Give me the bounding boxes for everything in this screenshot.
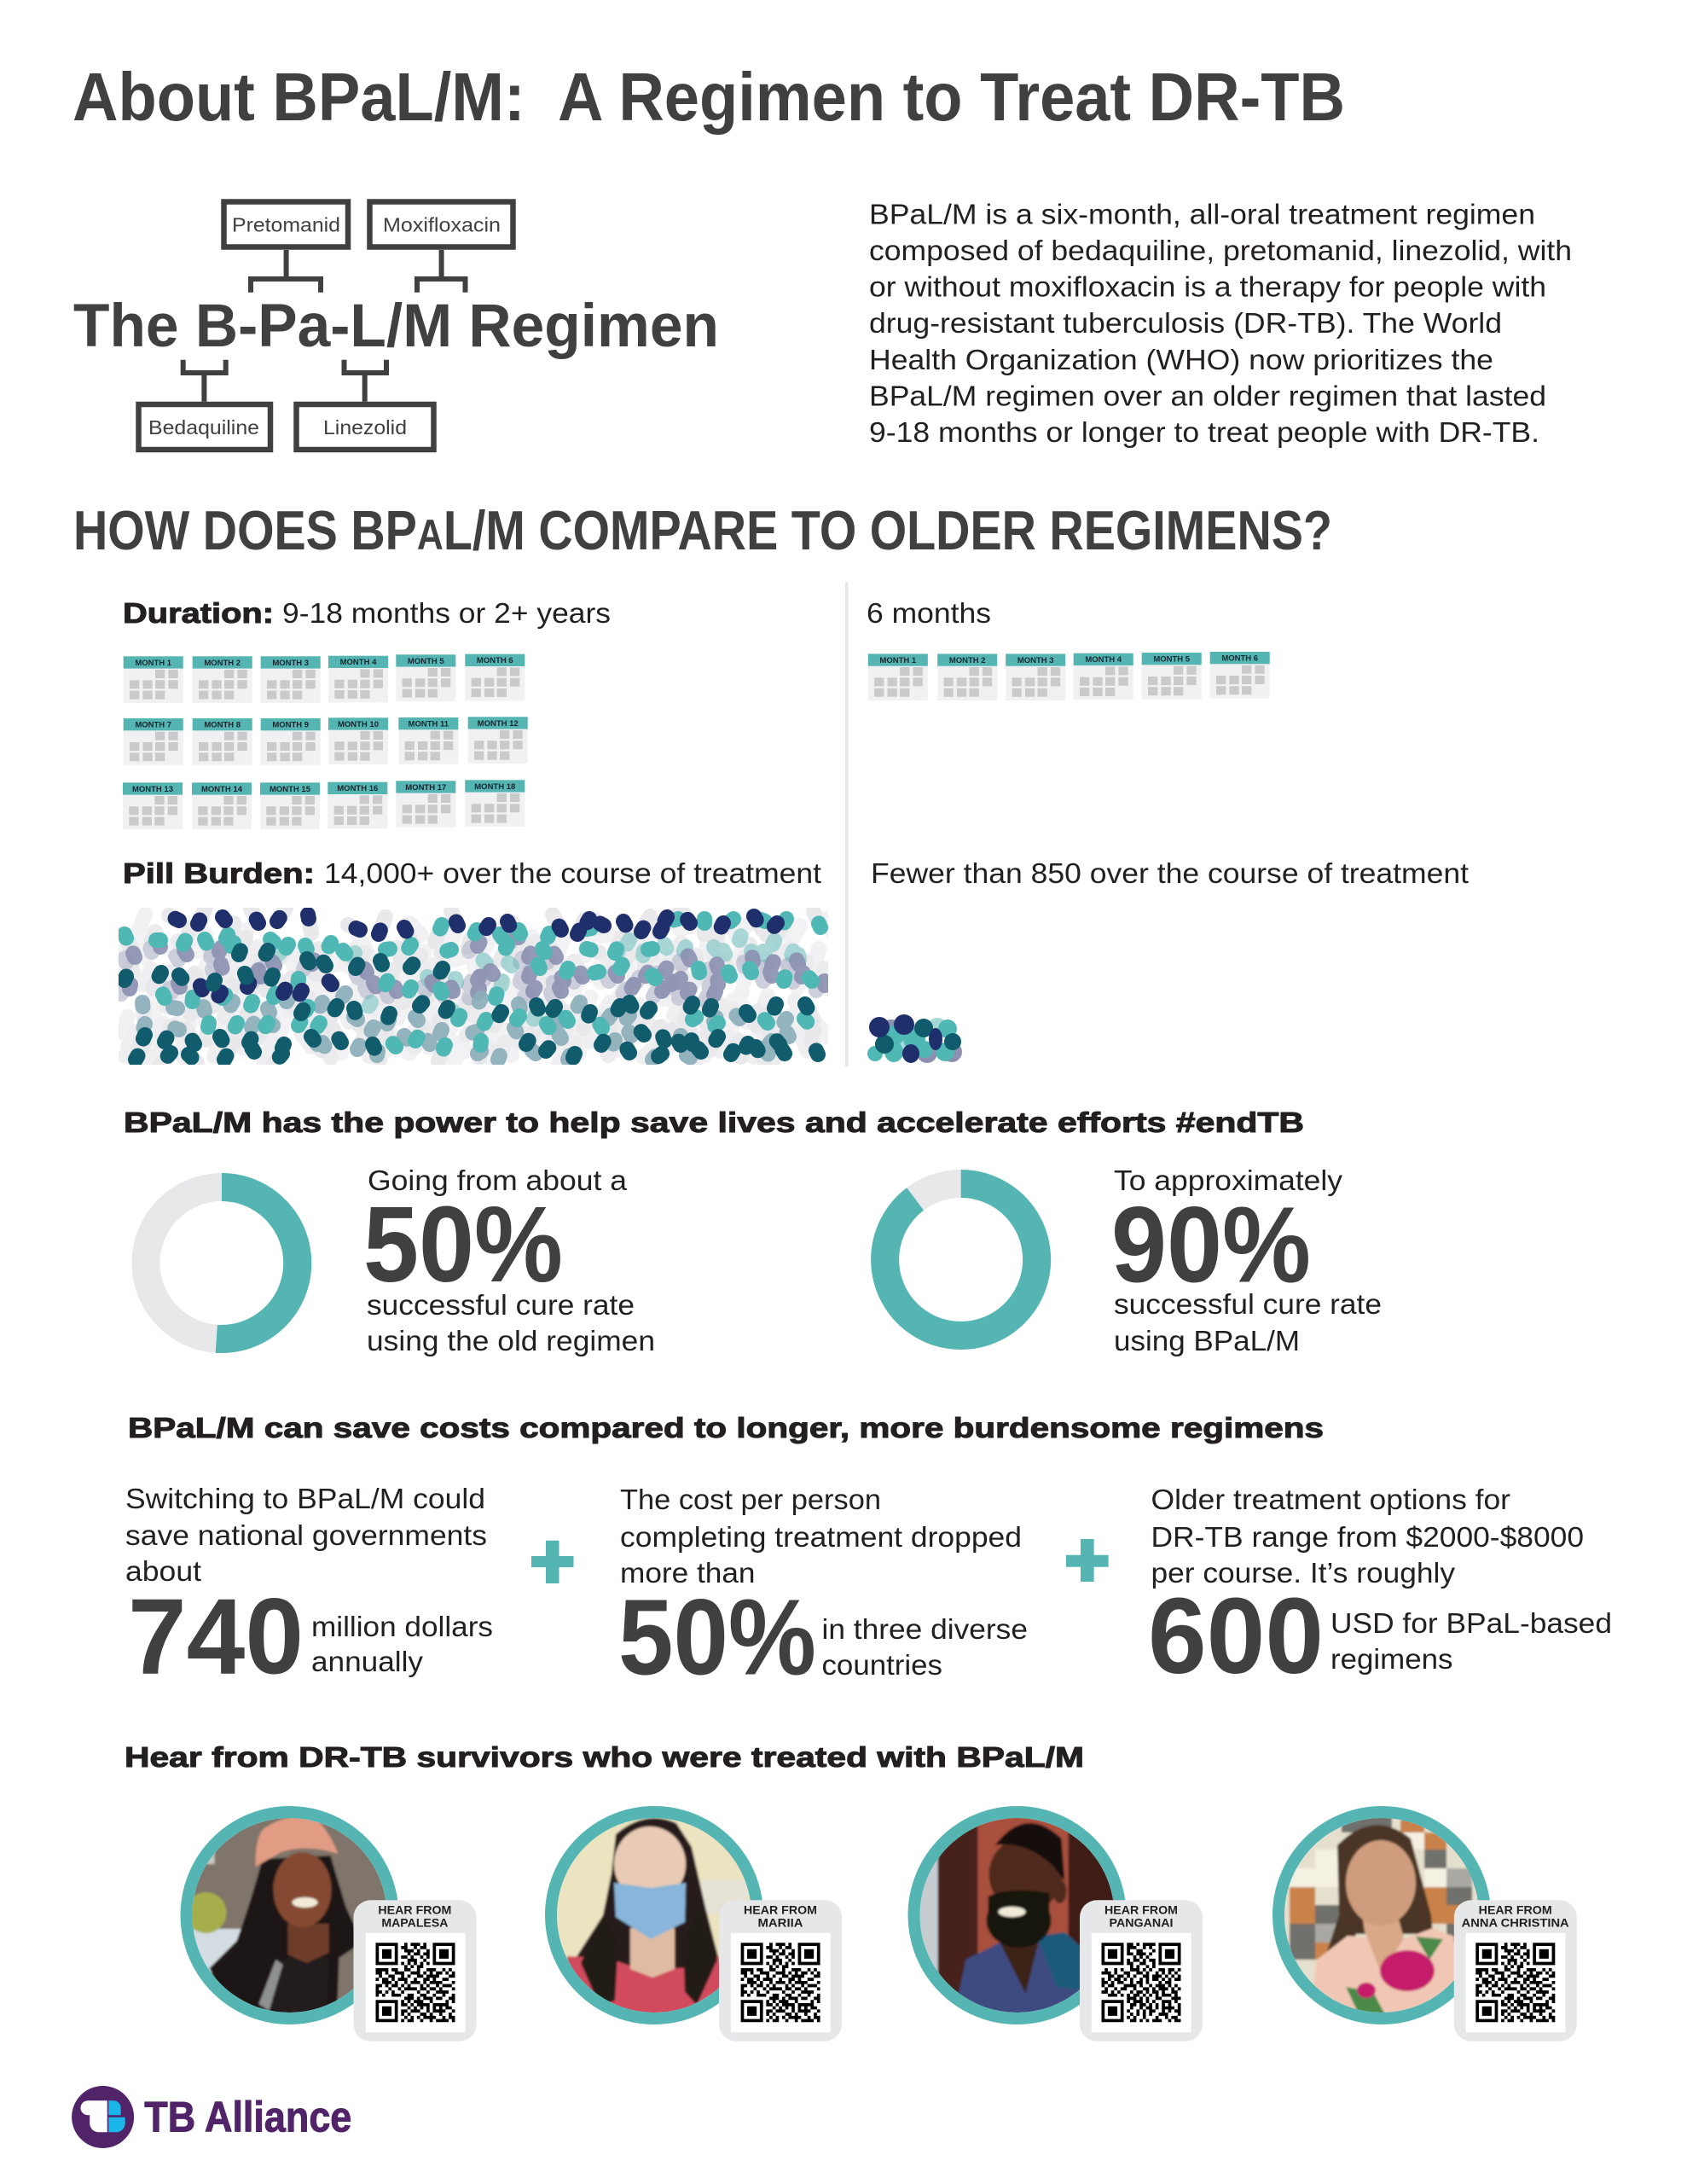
- calendars: 6 months: [868, 652, 1270, 700]
- calendar: month 15: MONTH 15: [270, 785, 311, 794]
- text block: regimen description: drug-resistant tuberculosis (DR-TB). The World: [869, 307, 1502, 339]
- stat: 50% cost drop: countries: [822, 1649, 942, 1681]
- icon: plus: [531, 1541, 573, 1583]
- calendar: month 18: [465, 780, 525, 827]
- stat: 740 million dollars: 740: [128, 1577, 304, 1696]
- icon: plus: [1066, 1539, 1109, 1582]
- stat: 50% cure rate: 50%: [363, 1184, 563, 1304]
- logo: TB Alliance: [72, 2086, 351, 2148]
- calendar: month 17: MONTH 17: [405, 783, 446, 793]
- box: Linezolid: Linezolid: [323, 416, 407, 439]
- stat: 600 USD: Older treatment options for: [1151, 1484, 1510, 1515]
- pill cluster: fewer than 850 pills: [867, 1014, 962, 1063]
- box: Moxifloxacin: Moxifloxacin: [383, 213, 501, 235]
- card: QR code for Panganai: HEAR FROM: [1104, 1902, 1178, 1916]
- stat: 740 million dollars: [125, 1483, 493, 1696]
- stat: 740 million dollars: annually: [311, 1646, 424, 1677]
- calendar: month 1: [868, 653, 928, 700]
- card: QR code for Anna Christina: [1454, 1900, 1577, 2042]
- calendar: month 2: [937, 653, 997, 700]
- heading: hear from survivors: Hear from DR-TB survivors who were treated with BPaL/M: [125, 1741, 1084, 1773]
- heading: power to save lives: BPaL/M has the power to help save lives and accelerate efforts #endTB: [124, 1107, 1304, 1138]
- calendar: month 15: [260, 782, 320, 829]
- calendar: month 2: MONTH 2: [204, 659, 241, 668]
- card: QR code for Mariia: [719, 1900, 842, 2042]
- text block: regimen description: [869, 198, 1572, 448]
- stat: 90% cure rate: [1111, 1165, 1382, 1356]
- portrait: Panganai: [914, 1812, 1121, 2018]
- calendar: month 7: [124, 718, 183, 765]
- heading: cost savings: BPaL/M can save costs compared to longer, more burdensome regimens: [128, 1412, 1324, 1443]
- stat: 50% cost drop: completing treatment dropped: [620, 1521, 1022, 1553]
- text block: regimen description: Health Organization (WHO) now prioritizes the: [869, 344, 1493, 375]
- calendar: month 5: [1142, 653, 1202, 700]
- stat: 90% cure rate: using BPaL/M: [1114, 1325, 1300, 1356]
- calendar: month 18: MONTH 18: [474, 782, 515, 792]
- calendar: month 17: [396, 781, 455, 828]
- calendar: month 5: MONTH 5: [408, 657, 444, 666]
- card: QR code for Panganai: [1080, 1900, 1203, 2042]
- card: QR code for Mariia: HEAR FROM: [744, 1902, 817, 1916]
- calendar: month 6: [465, 654, 525, 700]
- column divider: [845, 582, 848, 1066]
- diagram: the B-Pa-L/M regimen: [73, 201, 719, 450]
- stat: 50% cost drop: The cost per person: [620, 1484, 881, 1515]
- stat: 50% cost drop: more than: [620, 1557, 756, 1589]
- stat: 740 million dollars: Switching to BPaL/M could: [125, 1483, 485, 1514]
- duration label: older regimens: [123, 597, 611, 629]
- stat: 50% cost drop: [618, 1484, 1028, 1698]
- calendar: month 6: [1210, 652, 1270, 699]
- calendar: month 1: MONTH 1: [135, 659, 172, 668]
- pill burden label: older regimens: 14,000+ over the course of treatment: [324, 857, 821, 889]
- calendar: month 14: MONTH 14: [201, 785, 243, 794]
- calendar: month 4: MONTH 4: [340, 658, 377, 667]
- box: Pretomanid: Pretomanid: [232, 213, 340, 235]
- card: QR code for Mapalesa: HEAR FROM: [378, 1902, 451, 1916]
- stat: 740 million dollars: million dollars: [311, 1611, 493, 1642]
- card: QR code for Mariia: MARIIA: [757, 1915, 803, 1929]
- box: Pretomanid: [223, 201, 348, 247]
- calendar: month 4: [1074, 653, 1133, 700]
- box: Moxifloxacin: [370, 201, 513, 247]
- duration label: older regimens: Duration:: [123, 597, 274, 629]
- calendar: month 6: MONTH 6: [1221, 653, 1258, 664]
- survivor: Mariia: [551, 1812, 842, 2042]
- box: Bedaquiline: Bedaquiline: [148, 416, 259, 439]
- box: Bedaquiline: [138, 404, 270, 450]
- calendar: month 3: MONTH 3: [1017, 656, 1054, 665]
- calendar: month 9: [261, 718, 321, 765]
- calendars: 18 months: [123, 654, 528, 829]
- stat: 50% cost drop: 50%: [618, 1577, 816, 1698]
- duration label: older regimens: 9-18 months or 2+ years: [282, 597, 611, 629]
- calendar: month 3: [1006, 653, 1065, 700]
- calendar: month 10: [328, 717, 388, 764]
- connector brackets: [183, 250, 465, 402]
- pill burden label: older regimens: Pill Burden:: [123, 857, 315, 889]
- calendar: month 9: MONTH 9: [272, 720, 309, 730]
- text block: regimen description: composed of bedaquiline, pretomanid, linezolid, with: [869, 235, 1572, 266]
- pill field: 14,000+ pills: [114, 908, 834, 1069]
- calendar: month 1: MONTH 1: [879, 656, 917, 665]
- stat: 50% cost drop: in three diverse: [822, 1613, 1028, 1645]
- calendar: month 3: [261, 656, 321, 703]
- survivor: Mapalesa: [186, 1812, 476, 2042]
- stat: 600 USD: [1148, 1484, 1612, 1696]
- box: Linezolid: [297, 404, 433, 450]
- duration label: BPaL/M: 6 months: [867, 597, 991, 629]
- survivor: Anna Christina: [1278, 1812, 1577, 2042]
- calendar: month 13: [123, 782, 183, 829]
- wordmark: TB Alliance: [144, 2093, 351, 2140]
- stat: 600 USD: 600: [1148, 1576, 1324, 1696]
- card: QR code for Mapalesa: [353, 1900, 476, 2042]
- calendar: month 8: MONTH 8: [204, 720, 241, 730]
- pill burden label: BPaL/M: Fewer than 850 over the course of treatment: [871, 857, 1469, 889]
- text block: regimen description: or without moxifloxacin is a therapy for people with: [869, 271, 1546, 302]
- stat: 50% cure rate: Going from about a: [368, 1165, 628, 1196]
- card: QR code for Anna Christina: HEAR FROM: [1479, 1902, 1552, 1916]
- donut chart: 90%: [885, 1184, 1037, 1336]
- pill burden label: older regimens: [123, 857, 821, 889]
- stat: 90% cure rate: 90%: [1111, 1184, 1311, 1305]
- calendar: month 11: MONTH 11: [409, 720, 449, 729]
- calendar: month 1: [124, 656, 183, 703]
- heading: comparison: HOW DOES BPAL/M COMPARE TO OLDER REGIMENS?: [73, 499, 1332, 561]
- calendar: month 4: MONTH 4: [1085, 655, 1122, 665]
- calendar: month 2: MONTH 2: [949, 656, 986, 665]
- stat: 90% cure rate: To approximately: [1114, 1165, 1343, 1196]
- stat: 600 USD: regimens: [1330, 1643, 1453, 1675]
- text block: regimen description: BPaL/M regimen over an older regimen that lasted: [869, 380, 1546, 411]
- icon: TB Alliance mark: [72, 2086, 134, 2148]
- stat: 50% cure rate: [363, 1165, 655, 1356]
- calendar: month 12: [468, 717, 528, 764]
- stat: 50% cure rate: successful cure rate: [367, 1289, 635, 1321]
- calendar: month 2: [193, 656, 252, 703]
- calendar: month 16: MONTH 16: [337, 784, 378, 793]
- calendar: month 13: MONTH 13: [132, 785, 173, 794]
- portrait: Mariia: [551, 1812, 757, 2018]
- card: QR code for Panganai: PANGANAI: [1109, 1915, 1174, 1929]
- stat: 600 USD: USD for BPaL-based: [1330, 1607, 1612, 1639]
- stat: 600 USD: per course. It’s roughly: [1151, 1557, 1456, 1589]
- calendar: month 5: MONTH 5: [1153, 655, 1191, 664]
- stat: 50% cure rate: using the old regimen: [367, 1325, 655, 1356]
- stat: 740 million dollars: save national governments: [125, 1519, 487, 1551]
- calendar: month 12: MONTH 12: [478, 719, 519, 729]
- diagram heading: The B-Pa-L/M Regimen: [73, 293, 719, 360]
- stat: 90% cure rate: successful cure rate: [1114, 1288, 1382, 1320]
- survivor: Panganai: [914, 1812, 1203, 2042]
- calendar: month 11: [398, 717, 458, 764]
- card: QR code for Mapalesa: MAPALESA: [381, 1915, 448, 1929]
- calendar: month 6: MONTH 6: [477, 656, 513, 665]
- calendar: month 8: [193, 718, 252, 765]
- calendar: month 16: [328, 782, 387, 828]
- text block: regimen description: 9-18 months or longer to treat people with DR-TB.: [869, 416, 1539, 448]
- portrait: Mapalesa: [186, 1812, 392, 2018]
- calendar: month 14: [192, 782, 252, 829]
- stat: 740 million dollars: about: [125, 1555, 201, 1587]
- text block: regimen description: BPaL/M is a six-month, all-oral treatment regimen: [869, 198, 1535, 230]
- calendar: month 3: MONTH 3: [272, 659, 309, 668]
- card: QR code for Anna Christina: ANNA CHRISTINA: [1462, 1915, 1569, 1929]
- donut chart: 50%: [146, 1188, 298, 1339]
- calendar: month 5: [396, 654, 455, 701]
- stat: 600 USD: DR-TB range from $2000-$8000: [1151, 1521, 1584, 1553]
- calendar: month 7: MONTH 7: [135, 720, 171, 730]
- title: About BPaL/M: A Regimen to Treat DR-TB: [72, 59, 1345, 135]
- calendar: month 4: [328, 656, 388, 702]
- portrait: Anna Christina: [1278, 1812, 1485, 2018]
- calendar: month 10: MONTH 10: [338, 720, 379, 729]
